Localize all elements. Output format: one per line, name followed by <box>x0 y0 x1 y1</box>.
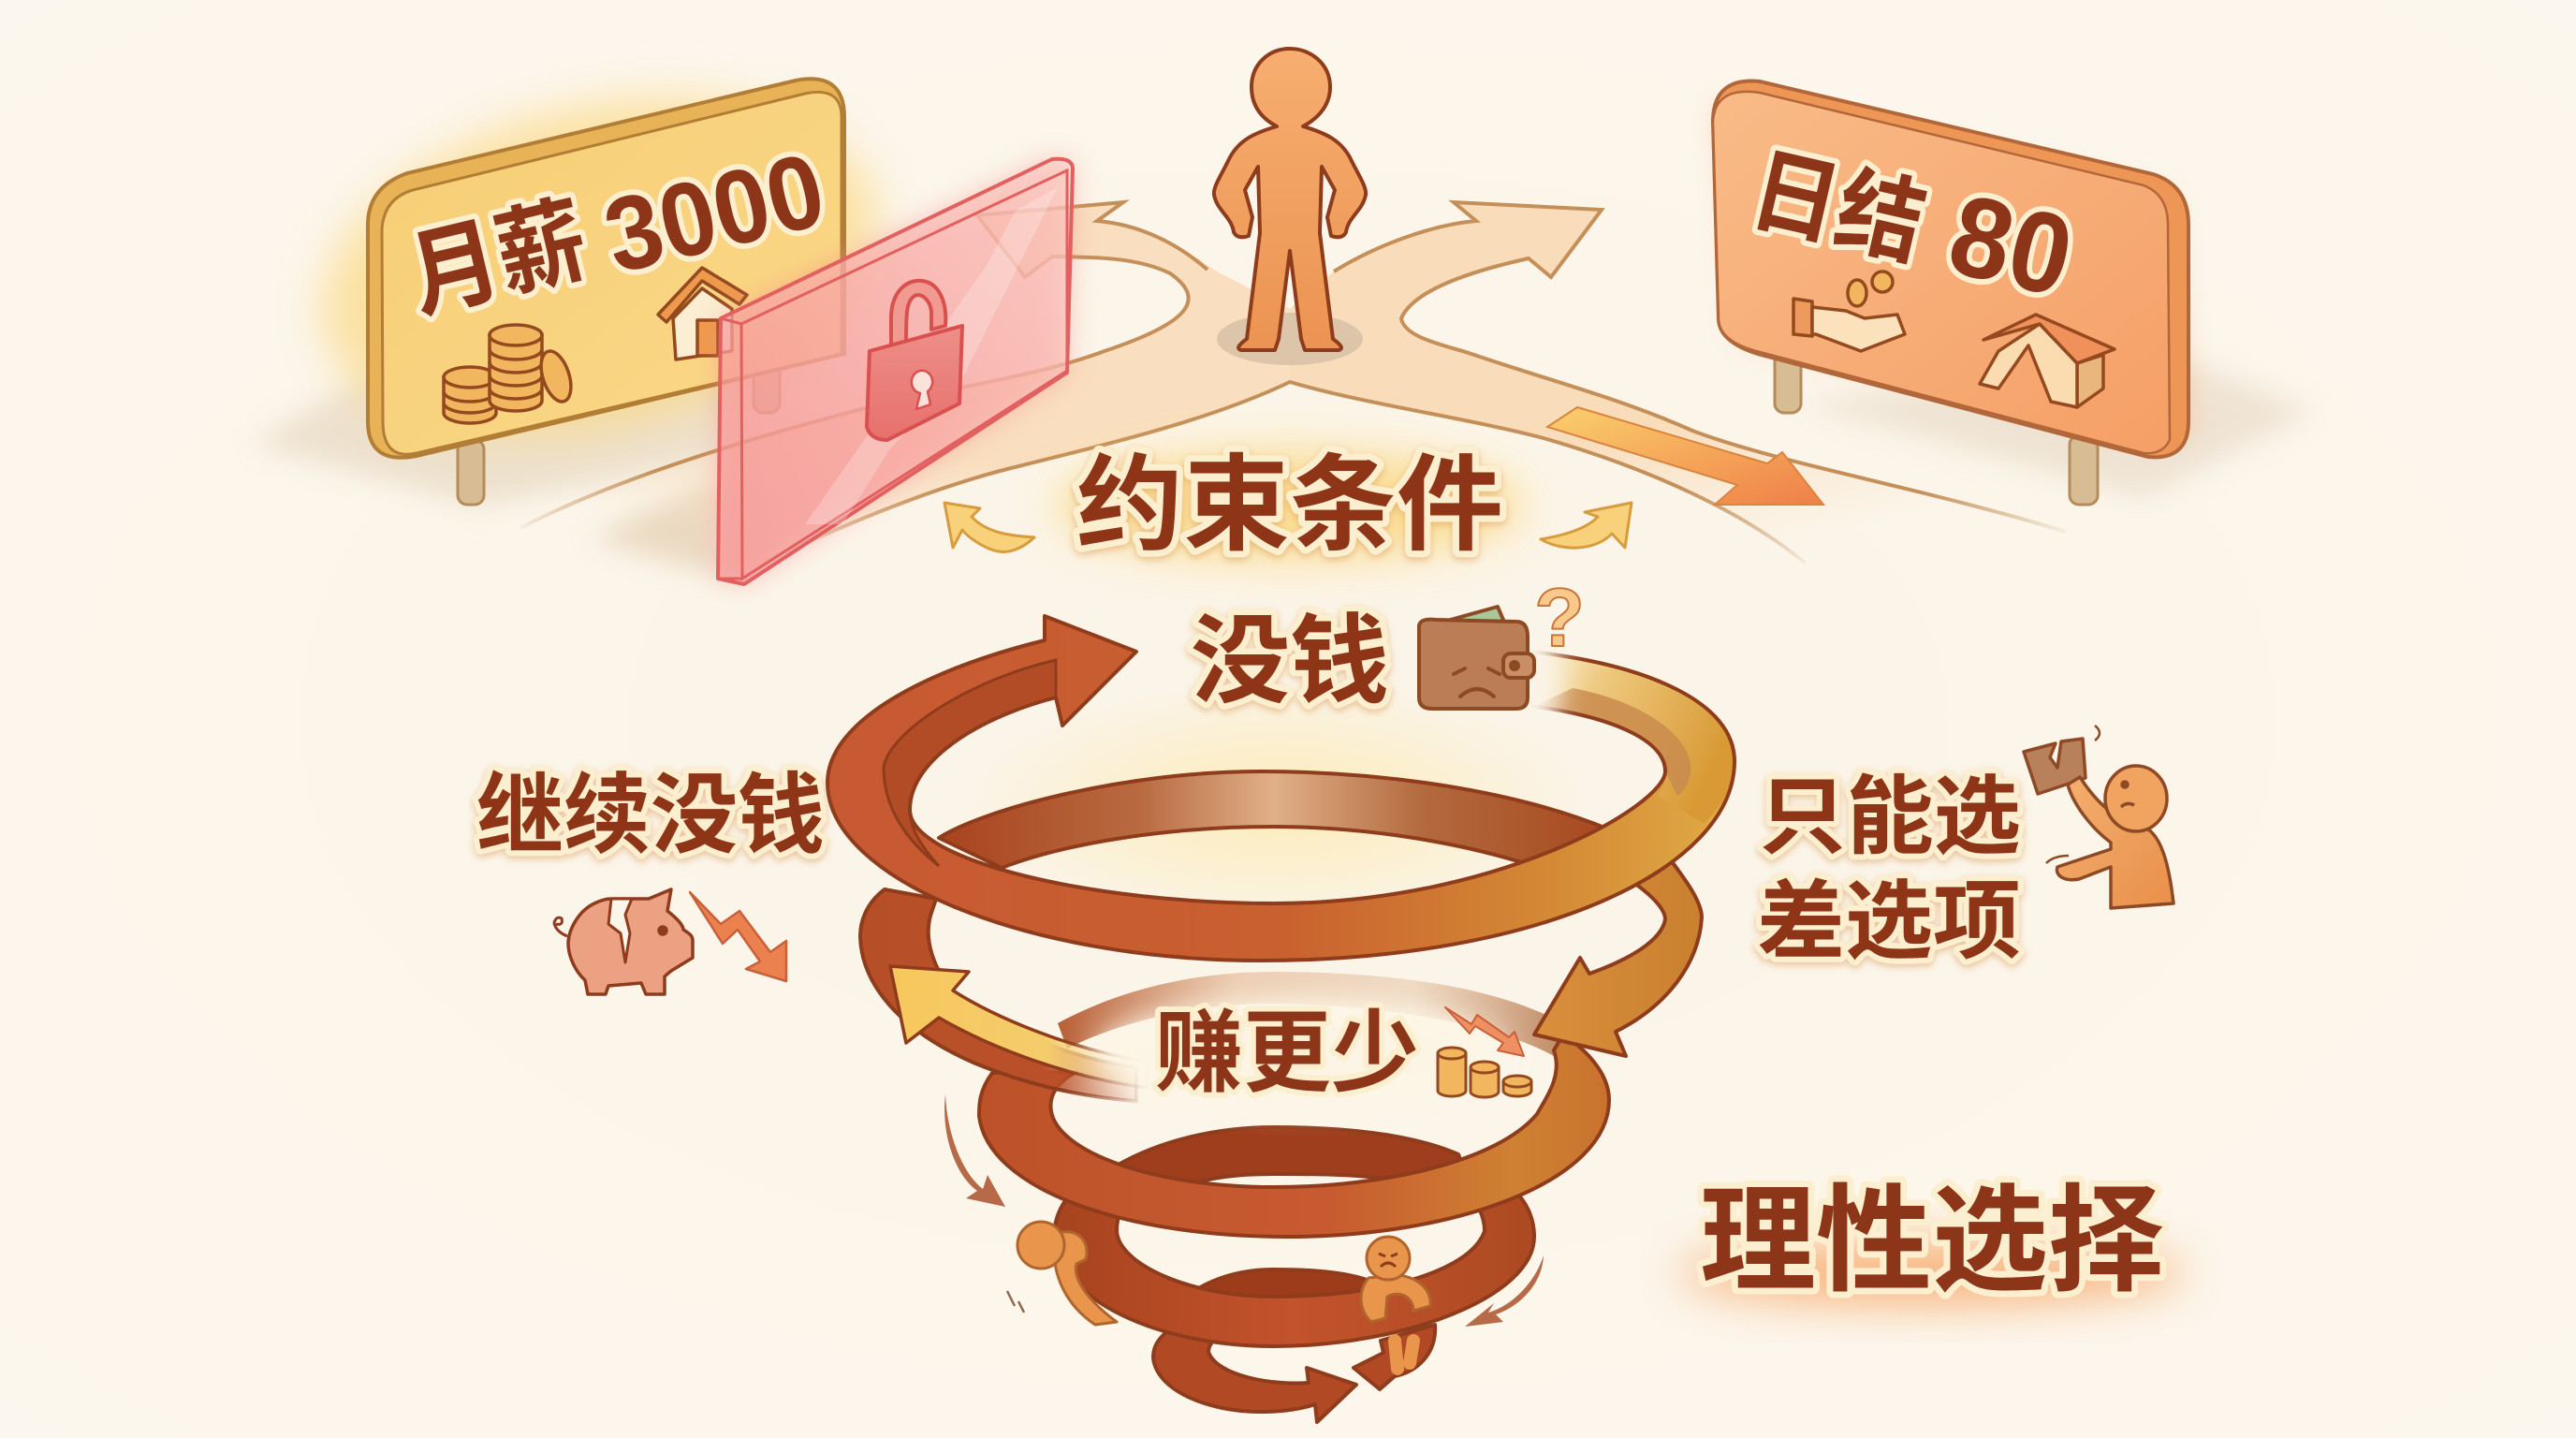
arrow: constraint right <box>1541 503 1632 548</box>
forked road <box>520 202 2066 573</box>
earn-less text glow <box>1095 999 1507 1108</box>
arrow: ring 2 right <box>1534 857 1702 1056</box>
ring 1 with arrow <box>827 616 1734 961</box>
icon: shack <box>1980 315 2115 407</box>
label: only bad options: 只能选 <box>1759 747 2021 872</box>
label: daily pay: 日结 <box>1740 113 1940 285</box>
constraint glass barrier <box>718 159 1073 584</box>
icon: coins <box>444 325 577 423</box>
icon: sad wallet <box>1419 571 1585 709</box>
label: no money: 没钱 <box>1191 581 1389 723</box>
label: earn less: 赚更少 <box>1155 980 1419 1110</box>
sign: monthly salary 3000 <box>289 49 909 505</box>
arrow: earn less to keep broke <box>890 966 1147 1088</box>
label: still broke: 继续没钱 <box>476 744 825 872</box>
move arrow on road <box>1547 407 1823 505</box>
spiral bottom ring <box>1153 1269 1435 1422</box>
icon: falling coins <box>1438 1007 1531 1097</box>
ring 3 back <box>1058 972 1563 1056</box>
figure: person slumped right <box>1361 1237 1430 1369</box>
icon: padlock <box>867 281 962 440</box>
ring 4 <box>1054 1127 1534 1346</box>
vicious spiral <box>827 616 1734 1422</box>
title: rational choice: 理性选择 <box>1700 1146 2164 1314</box>
sign: daily pay 80 <box>1713 81 2190 505</box>
arrow: falling left <box>944 1094 1005 1207</box>
label: monthly pay: 月薪 <box>394 163 599 338</box>
ring 3 front <box>979 1034 1609 1237</box>
label: 80: 80 <box>1939 169 2084 321</box>
title glow <box>1679 1241 2185 1305</box>
ring 2 left <box>860 889 1136 1101</box>
heading glow <box>1056 451 1524 560</box>
icon: question mark: ? <box>1534 571 1585 664</box>
arrow: falling right <box>1465 1255 1544 1327</box>
heading: constraints: 约束条件 <box>1076 420 1503 572</box>
figure: person with torn paper <box>2024 726 2174 908</box>
icon: broken piggy bank <box>554 889 693 994</box>
label: only bad options: 差选项 <box>1757 852 2021 976</box>
ground shadows <box>255 342 2312 576</box>
ring 1 left inner wall <box>884 660 1056 866</box>
arrow: constraint left <box>944 503 1034 551</box>
label: only bad options <box>1757 747 2021 976</box>
ring 1 fading tail <box>1530 652 1734 824</box>
figure: person clinging left <box>1007 1222 1117 1325</box>
right sign posts <box>1775 337 1801 413</box>
ring 1 outline <box>827 616 1734 961</box>
left sign post <box>458 440 484 505</box>
ring 1 right inner wall <box>1535 688 1690 796</box>
arrow: zigzag down <box>690 892 786 981</box>
icon: hand with coins <box>1793 271 1905 351</box>
ring 1 back <box>939 771 1609 868</box>
label: 3000: 3000 <box>594 130 835 295</box>
person at crossroads <box>1214 49 1366 365</box>
icon: house <box>658 268 747 360</box>
